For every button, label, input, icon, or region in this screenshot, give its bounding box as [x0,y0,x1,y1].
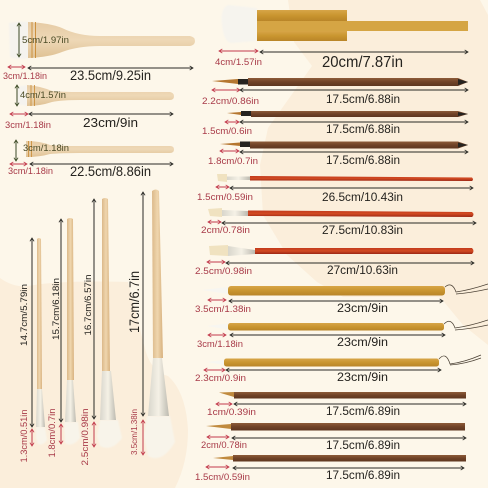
length label: 17.5cm/6.89in [326,440,400,452]
length label: 23.5cm/9.25in [70,68,151,83]
bristle arrow [220,150,239,152]
bristle arrow [216,403,232,405]
bristle label: 2cm/0.78in [201,225,250,235]
length arrow [229,300,443,302]
length label: 23cm/9in [337,372,388,384]
brush group: round mop brushes [19,190,175,466]
bristle arrow [60,424,62,444]
bristle label: 1.5cm/0.59in [197,192,253,202]
length label: 17.5cm/6.88in [326,124,400,136]
length label: 23cm/9in [337,337,388,349]
height label: 3cm/1.18in [23,143,69,153]
bristle arrow [208,334,226,336]
height label: 5cm/1.97in [22,35,69,45]
brush group: right column [195,5,488,482]
bristle arrow [208,299,226,301]
length arrow [30,163,173,165]
bristle label: 2.3cm/0.9in [195,373,246,383]
bristle label: 1.3cm/0.51in [19,410,29,462]
length arrow [226,262,474,264]
length arrow [60,219,62,422]
bamboo brush 3 [195,355,481,384]
length arrow [240,121,468,123]
bristle label: 3cm/1.18in [197,339,243,349]
bristle label: 2.2cm/0.86in [202,96,259,106]
bristle label: 3cm/1.18in [5,120,51,130]
bristle arrow [8,66,25,68]
bristle arrow [225,121,239,123]
length arrow [142,192,144,416]
length arrow [232,437,466,439]
red brush 1 [197,174,473,204]
red brush 3 [195,245,474,277]
length arrow [233,467,464,469]
bristle arrow [207,261,225,263]
bristle arrow [208,221,221,223]
length arrow [29,113,173,115]
hake bamboo brush [215,5,468,71]
length arrow [260,51,468,53]
length arrow [240,89,468,91]
length label: 17.5cm/6.88in [326,155,400,167]
bristle label: 3cm/1.18in [3,71,47,81]
length arrow [93,199,95,419]
length label: 16.7cm/6.57in [83,274,94,336]
bristle label: 3cm/1.18in [8,166,53,176]
bristle label: 1.5cm/0.59in [195,472,250,482]
bristle label: 1cm/0.39in [207,407,256,417]
length label: 22.5cm/8.86in [70,164,151,179]
bristle label: 3.5cm/1.38in [195,304,251,314]
length label: 14.7cm/5.79in [19,284,30,346]
bristle arrow [93,422,95,447]
mop brush 2 [47,218,80,458]
bamboo brush 2 [197,320,488,349]
brush group: flat wooden spatula brushes [3,22,195,179]
bamboo brush 1 [195,284,488,315]
brown brush a [202,78,468,106]
bristle arrow [10,113,28,115]
bristle arrow [10,163,27,165]
bristle arrow [206,466,229,468]
spatula brush 3 [8,140,174,179]
bristle label: 4cm/1.57in [215,57,262,67]
red brush 2 [201,208,476,237]
dark brush 3 [195,455,466,482]
length label: 17cm/6.7in [127,271,142,333]
length arrow [222,222,476,224]
length label: 26.5cm/10.43in [322,192,403,204]
bristle arrow [31,429,33,446]
bristle arrow [216,186,229,188]
length arrow [234,403,466,405]
length arrow [31,238,33,427]
mop brush 1 [19,238,47,462]
bristle arrow [207,436,229,438]
spatula brush 2 [5,85,174,130]
length label: 17.5cm/6.88in [326,94,400,106]
bristle label: 2.5cm/0.98in [195,266,252,276]
bristle label: 1.8cm/0.7in [208,156,258,166]
length label: 27cm/10.63in [327,265,398,277]
mop brush 4 [127,190,175,458]
dark brush 1 [207,392,466,418]
length label: 23cm/9in [83,116,138,130]
height arrow [16,85,18,106]
length label: 20cm/7.87in [322,54,403,71]
bristle label: 3.5cm/1.38in [130,409,139,455]
length label: 17.5cm/6.89in [326,406,400,418]
bristle arrow [142,420,144,455]
bristle label: 1.8cm/0.7in [47,408,57,458]
height arrow [15,140,17,161]
length label: 27.5cm/10.83in [322,225,403,237]
height label: 4cm/1.57in [20,90,66,100]
height arrow [18,23,20,57]
bristle label: 1.5cm/0.6in [202,126,252,136]
length arrow [230,334,445,336]
length arrow [28,67,193,69]
bristle arrow [212,89,240,91]
length label: 17.5cm/6.89in [326,470,400,482]
bristle label: 2cm/0.78in [201,440,247,450]
mop brush 3 [80,198,122,466]
spatula brush 1 [3,22,195,83]
brown brush c [208,142,468,167]
length label: 23cm/9in [337,303,388,315]
length label: 15.7cm/6.18in [51,278,62,340]
length arrow [226,369,441,371]
length arrow [240,151,468,153]
bristle arrow [204,369,225,371]
dark brush 2 [201,423,466,452]
bristle label: 2.5cm/0.98in [80,408,90,466]
brown brush b [202,111,468,136]
length arrow [230,187,473,189]
bristle arrow [219,50,258,52]
